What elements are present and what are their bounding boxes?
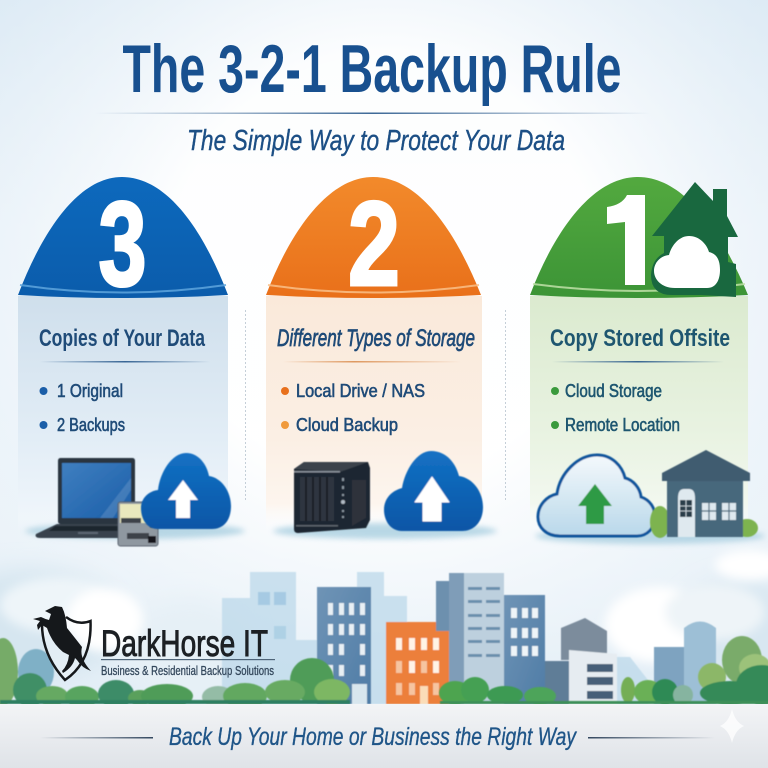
faded background buildings [222, 572, 648, 704]
icon: green house with cloud [651, 182, 738, 297]
skyline: trees [0, 636, 768, 709]
right side buildings [654, 622, 716, 704]
bullet list: Local Drive / NAS [296, 381, 425, 401]
logo tagline: Business & Residential Backup Solutions [101, 663, 274, 678]
icon: backup drive [118, 502, 158, 546]
logo wordmark: DarkHorse IT [101, 623, 268, 664]
panel 3 dome [530, 177, 748, 298]
panel 2 heading: Different Types of Storage [277, 325, 475, 352]
bullet list: Cloud Storage [565, 381, 662, 401]
panel 3 dome highlight [533, 284, 745, 291]
panel: 1 copy stored offsite [530, 177, 765, 544]
number 1 [607, 195, 645, 285]
bullet list: 1 Original [57, 381, 123, 401]
panel 3 background [530, 296, 748, 532]
bullet list [551, 381, 680, 435]
panel 1 dome highlight [20, 285, 226, 292]
column separators [246, 310, 506, 500]
bullet list [40, 381, 125, 435]
panel 2 background [266, 296, 482, 532]
skyline: city buildings [222, 572, 716, 704]
bullet list: 2 Backups [57, 415, 125, 435]
decorative sparkle icon [720, 709, 744, 743]
footer tagline: Back Up Your Home or Business the Right Way [169, 723, 577, 751]
panel 1 dome [18, 177, 228, 298]
icon: house [650, 450, 758, 538]
orange building [386, 622, 449, 704]
number 3: 3 [98, 177, 146, 311]
subtitle: The Simple Way to Protect Your Data [187, 125, 565, 157]
gray and white building [545, 618, 617, 704]
icon: upload cloud [384, 451, 483, 531]
icon: NAS [294, 462, 370, 533]
bullet list: Remote Location [565, 415, 680, 435]
tall tower [436, 573, 504, 704]
blue building middle [504, 595, 545, 704]
icon: laptop [36, 458, 136, 538]
panel 1 background [18, 296, 228, 532]
blue building left [317, 587, 371, 704]
number 2: 2 [348, 177, 400, 311]
panel: 3 copies of your data [18, 177, 245, 546]
icon: upload cloud [141, 453, 231, 529]
bullet list [281, 381, 425, 435]
logo shield with horse [33, 606, 91, 680]
logo: DarkHorse IT [33, 606, 275, 680]
footer band [0, 704, 768, 768]
panel 1 heading: Copies of Your Data [39, 325, 205, 352]
panel 2 dome highlight [268, 285, 479, 292]
panel: 2 different types of storage [266, 177, 497, 539]
icon: cloud with green arrow [538, 455, 655, 536]
skyline: clouds [0, 550, 768, 700]
bullet list: Cloud Backup [296, 415, 398, 435]
panel 2 dome [266, 177, 481, 298]
